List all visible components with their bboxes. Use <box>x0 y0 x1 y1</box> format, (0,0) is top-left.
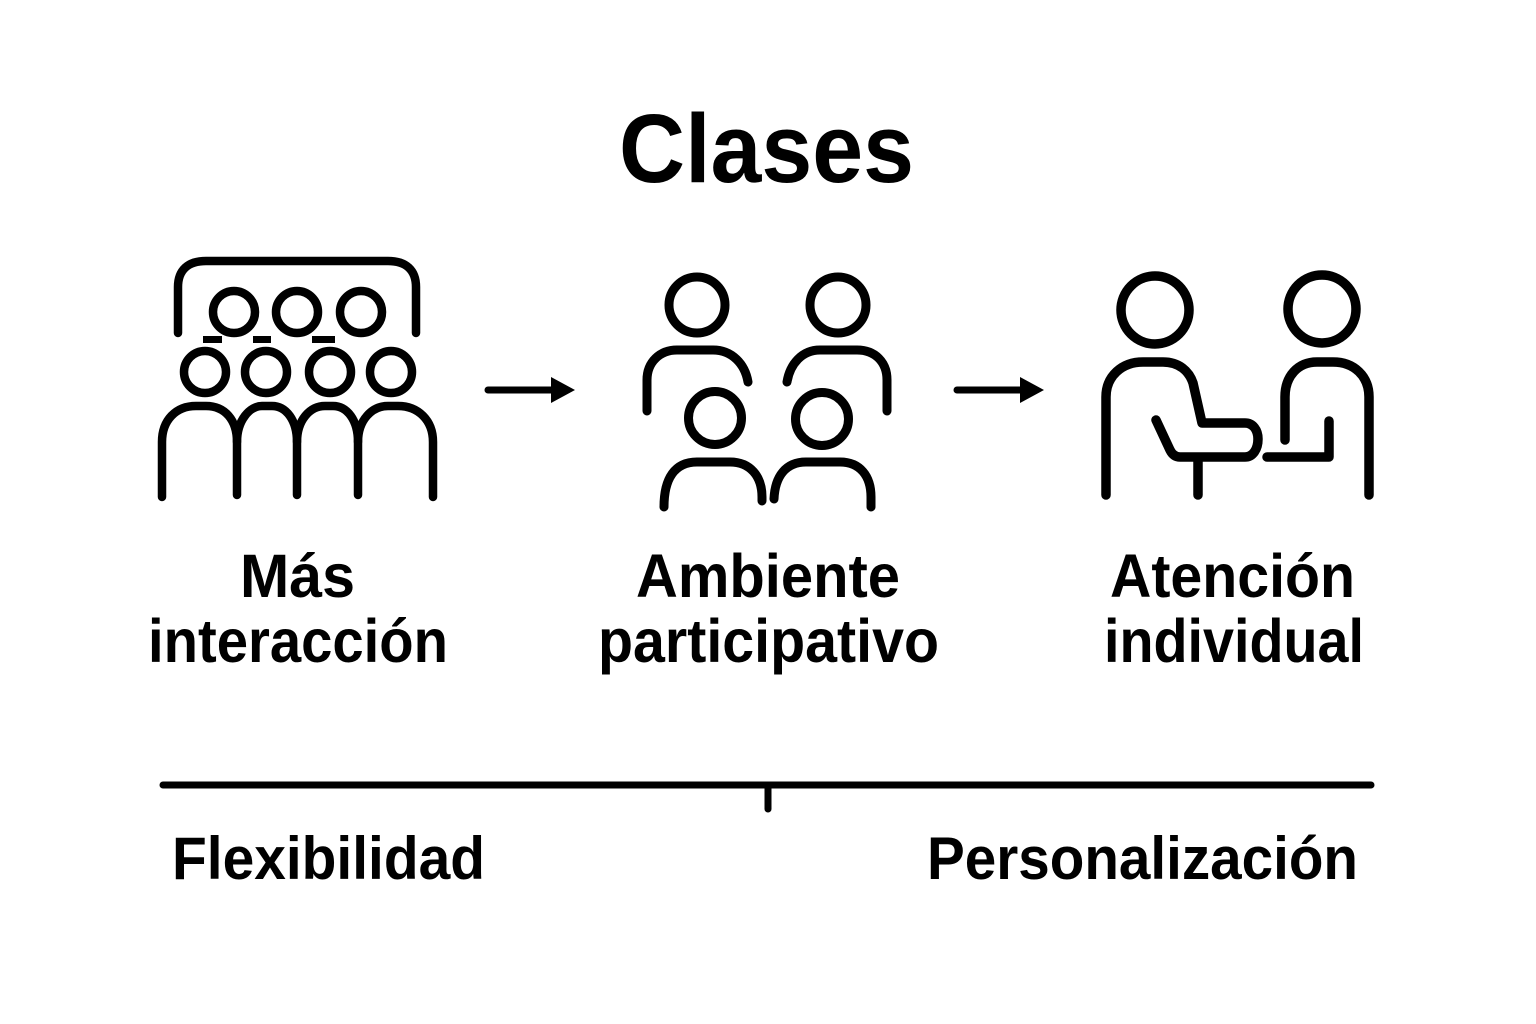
icon: large class group <box>162 261 433 497</box>
label: Personalización: Personalización <box>927 825 1358 892</box>
arrow: first to second <box>488 377 575 403</box>
label: Atención individual: individual <box>1104 607 1364 675</box>
title: Clases <box>619 94 914 203</box>
label: Atención individual <box>1104 542 1364 675</box>
label: Flexibilidad: Flexibilidad <box>172 825 485 892</box>
spectrum line with centre tick <box>163 785 1371 809</box>
label: Más interacción <box>148 542 448 675</box>
icon: small group <box>647 277 887 507</box>
label: Ambiente participativo: participativo <box>598 607 939 675</box>
arrow: second to third <box>957 377 1044 403</box>
label: Más interacción: interacción <box>148 607 448 675</box>
label: Ambiente participativo <box>598 542 939 675</box>
label: Atención individual: Atención <box>1110 542 1355 610</box>
label: Ambiente participativo: Ambiente <box>636 542 900 610</box>
label: Más interacción: Más <box>240 542 355 610</box>
icon: one-to-one attention <box>1106 275 1369 495</box>
